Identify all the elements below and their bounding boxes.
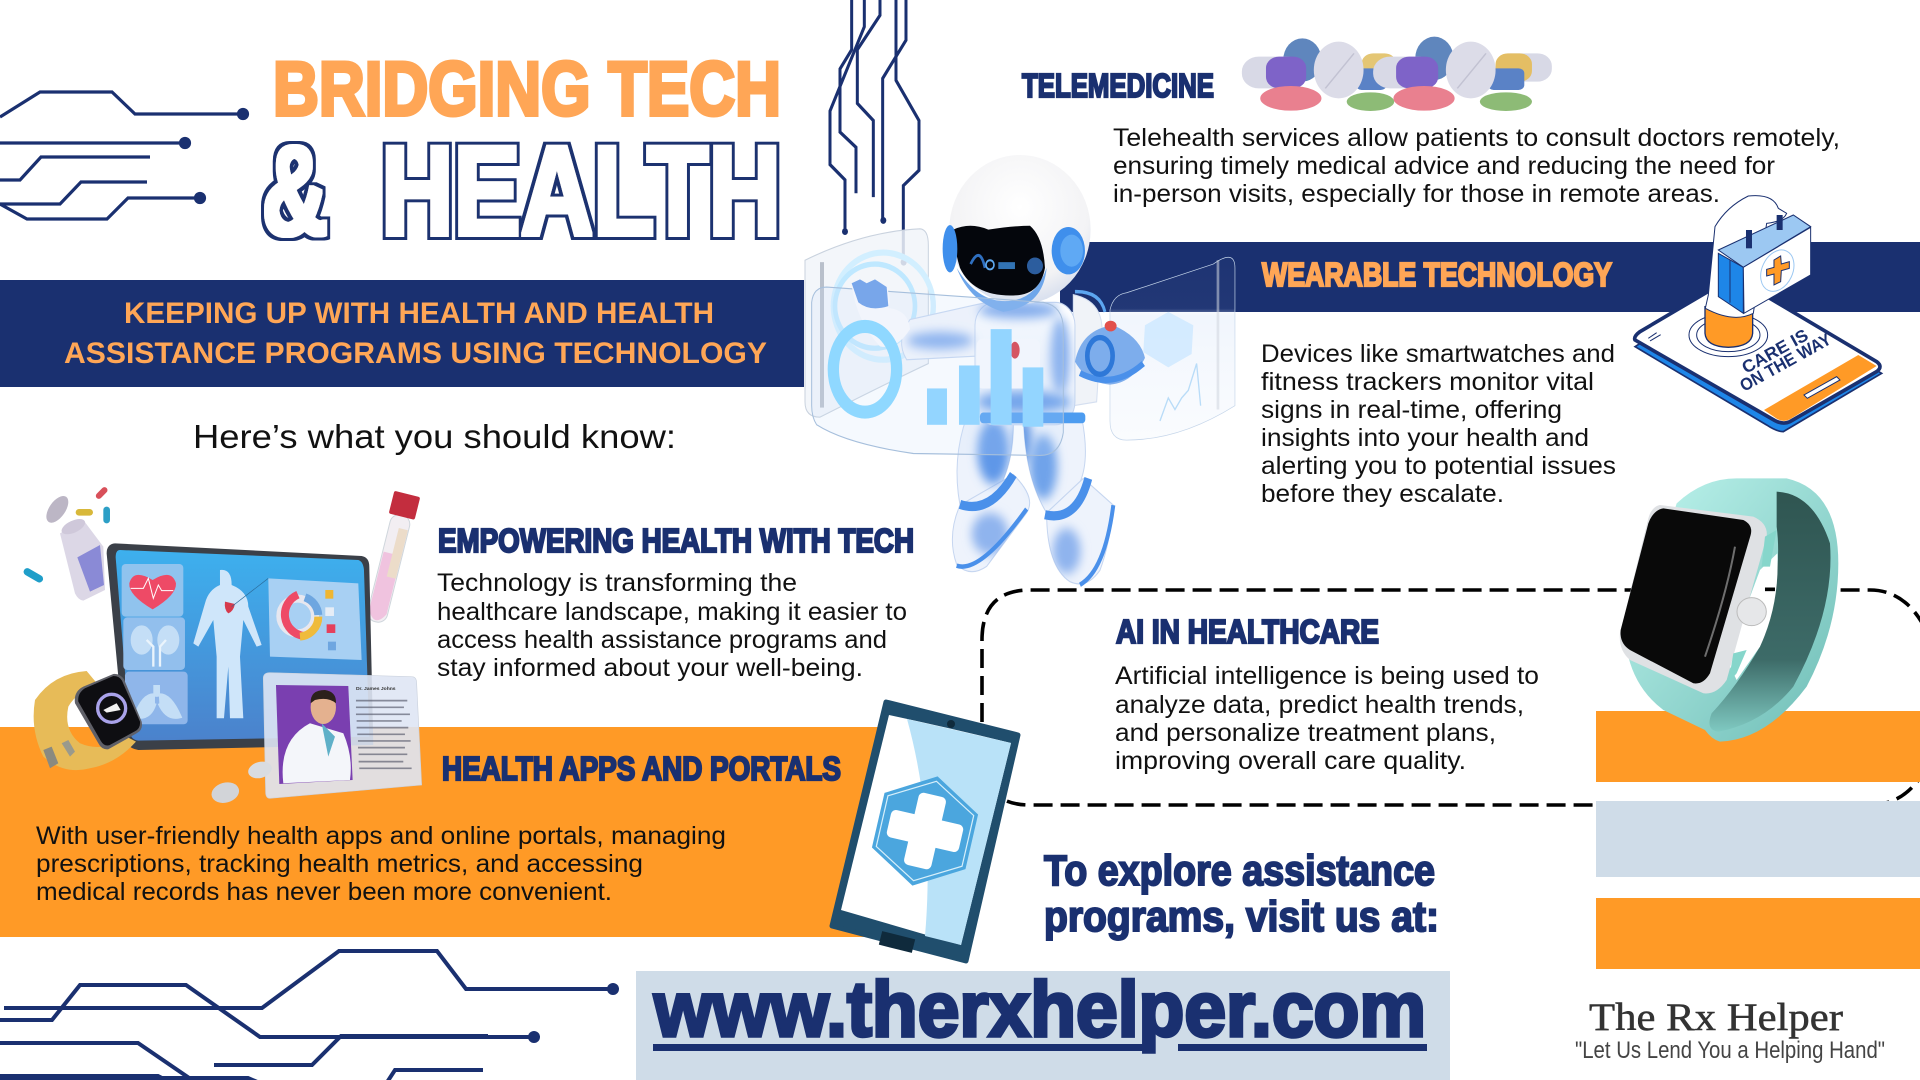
robot hands	[852, 279, 1145, 385]
robot legs and boots	[952, 417, 1113, 585]
text: health apps and portals: medical records has never been more convenient.	[36, 878, 612, 906]
icon: pills	[1242, 37, 1552, 111]
text: telemedicine: in-person visits, especially for those in remote areas.	[1113, 180, 1720, 208]
right colour blocks	[1596, 711, 1920, 969]
right glass panel	[1110, 257, 1235, 440]
text: health apps and portals: prescriptions, tracking health metrics, and accessing	[36, 850, 643, 878]
circuit lines: bottom left	[0, 951, 619, 1080]
text: telemedicine	[1113, 124, 1840, 208]
robot body	[902, 292, 1105, 425]
heading: wearable technology: WEARABLE TECHNOLOGY	[1262, 256, 1612, 293]
circuit lines: top centre	[830, 0, 919, 266]
logo: The Rx Helper: The Rx Helper	[1589, 996, 1843, 1039]
navy wearable band	[1060, 242, 1920, 312]
heading: telemedicine: TELEMEDICINE	[1022, 67, 1214, 104]
back glass panel	[805, 229, 933, 417]
subtitle: KEEPING UP WITH HEALTH AND HEALTH	[124, 297, 714, 330]
icon: phone with medical cross	[832, 702, 1018, 961]
URL background box	[636, 971, 1450, 1080]
circuit lines: top left	[0, 92, 248, 219]
text: AI in healthcare: Artificial intelligence is being used to	[1115, 662, 1539, 690]
icon: care is on the way phone: ON THE WAY	[1736, 329, 1835, 395]
subtitle: ASSISTANCE PROGRAMS USING TECHNOLOGY	[64, 337, 767, 370]
robot illustration	[805, 155, 1235, 585]
text: telemedicine: Telehealth services allow patients to consult doctors remotely,	[1113, 124, 1840, 152]
pill bottle and capsules	[22, 486, 110, 601]
heading: AI in healthcare: AI IN HEALTHCARE	[1116, 613, 1379, 650]
title: BRIDGING TECH	[273, 47, 781, 132]
bar chart hologram	[927, 329, 1043, 427]
text: wearable technology: signs in real-time, offering	[1261, 396, 1562, 424]
text: AI in healthcare: and personalize treatment plans,	[1115, 719, 1496, 747]
text: AI in healthcare	[1115, 662, 1539, 775]
intro line: Here’s what you should know:	[193, 418, 676, 455]
wrist watch	[34, 671, 142, 770]
text: wearable technology: fitness trackers monitor vital	[1261, 368, 1594, 396]
text: empowering health with tech: access health assistance programs and	[437, 626, 887, 654]
text: AI in healthcare: improving overall care quality.	[1115, 747, 1466, 775]
title: HEALTH	[381, 120, 781, 263]
heading: health apps and portals: HEALTH APPS AND PORTALS	[442, 750, 841, 787]
test tube	[363, 491, 420, 625]
text: empowering health with tech	[437, 569, 907, 682]
title: &	[262, 120, 328, 263]
dashed AI panel outline	[982, 590, 1920, 805]
icon: smartwatch	[1620, 478, 1838, 742]
call to action: To explore assistance	[1044, 847, 1435, 895]
orange health apps band	[0, 727, 890, 937]
front glass panel	[812, 287, 1063, 455]
text: empowering health with tech: stay informed about your well-being.	[437, 654, 863, 682]
logo: The Rx Helper	[1575, 996, 1885, 1064]
website URL: www.therxhelper.com	[653, 965, 1426, 1053]
call to action	[1044, 847, 1439, 941]
illustration: tablet, watch, doctor card	[22, 486, 422, 806]
title	[262, 47, 781, 263]
icon: care is on the way phone	[1635, 196, 1882, 432]
subtitle	[64, 297, 767, 370]
text: wearable technology	[1261, 340, 1616, 508]
text: health apps and portals	[36, 822, 726, 906]
text: AI in healthcare: analyze data, predict health trends,	[1115, 691, 1524, 719]
donut chart hologram	[833, 326, 897, 412]
text: wearable technology: Devices like smartwatches and	[1261, 340, 1615, 368]
text: wearable technology: before they escalate.	[1261, 480, 1504, 508]
text: wearable technology: alerting you to potential issues	[1261, 452, 1616, 480]
icon: care is on the way phone: CARE IS	[1738, 325, 1811, 377]
text: empowering health with tech: healthcare landscape, making it easier to	[437, 598, 907, 626]
heading: empowering health with tech: EMPOWERING HEALTH WITH TECH	[438, 522, 914, 559]
text: wearable technology: insights into your health and	[1261, 424, 1589, 452]
doctor card	[263, 673, 422, 798]
call to action: programs, visit us at:	[1044, 893, 1439, 941]
navy subtitle band	[0, 280, 804, 387]
text: health apps and portals: With user-friendly health apps and online portals, managing	[36, 822, 726, 850]
tablet	[107, 543, 373, 750]
small tablets	[209, 759, 274, 806]
text: empowering health with tech: Technology is transforming the	[437, 569, 797, 597]
text: telemedicine: ensuring timely medical advice and reducing the need for	[1113, 152, 1775, 180]
robot head	[943, 155, 1091, 312]
doctor card: Dr. James Johns	[356, 686, 396, 692]
